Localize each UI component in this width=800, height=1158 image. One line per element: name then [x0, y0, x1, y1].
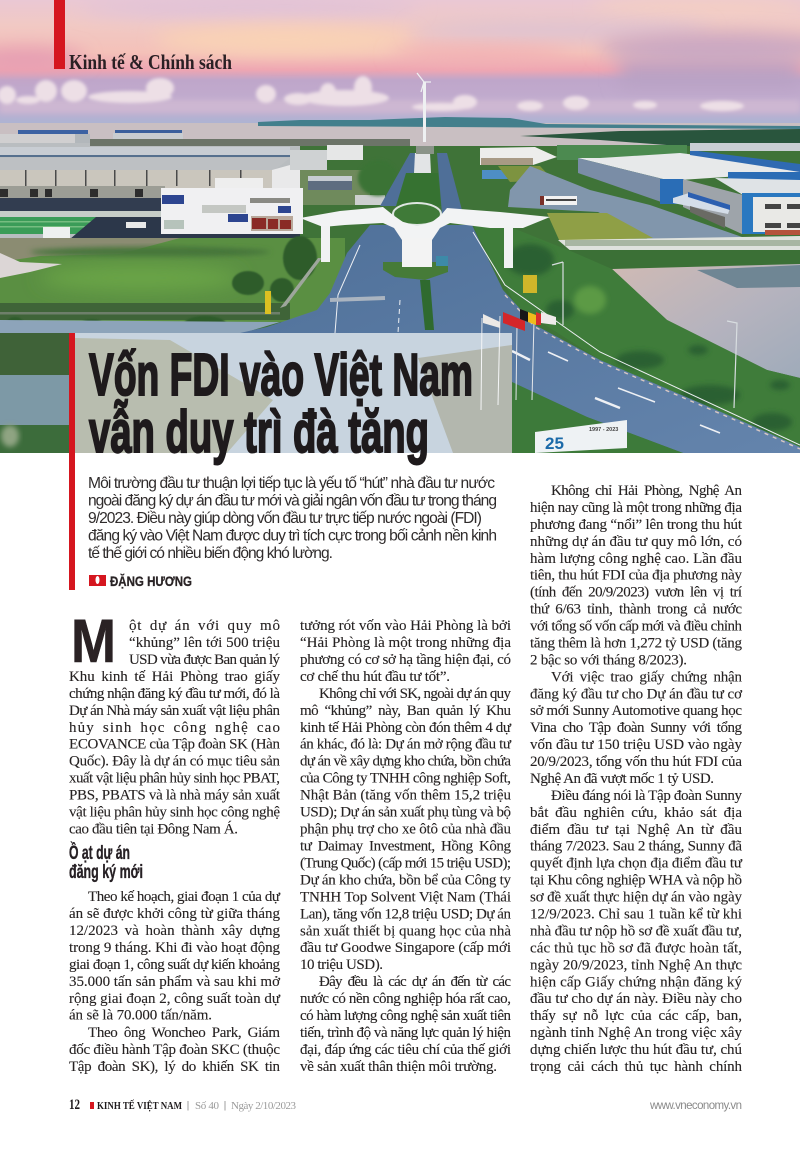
body column 1: án sẽ được khởi công từ giữa tháng — [69, 906, 280, 922]
title panel background — [75, 333, 512, 453]
body column 2: đại, đáp ứng các tiêu chí của thế giới — [300, 1042, 511, 1058]
body column 3: hiện nay cũng là một trong những địa — [530, 500, 742, 516]
body column 2: có hàm lượng công nghệ sản xuất tiên — [300, 1008, 512, 1024]
road seen through the title panel — [75, 333, 512, 453]
footer: KINH TẾ VIỆT NAM — [97, 1099, 182, 1112]
body column 2: kinh tế Hải Phòng còn đón thêm 4 dự — [300, 720, 512, 736]
sea — [0, 123, 800, 148]
body column 2: Nhật Bản (tăng vốn thêm 15,2 triệu — [300, 788, 512, 804]
body column 2: “Hải Phòng là một trong những địa — [300, 635, 511, 651]
body column 1: Dự án Nhà máy sản xuất vật liệu phân — [69, 703, 280, 719]
body column 2: phận phụ trợ cho xe ôtô của nhà đầu — [300, 822, 512, 838]
lawn — [547, 213, 653, 242]
lower left — [0, 333, 75, 453]
subheading — [69, 842, 143, 883]
footer: | — [224, 1100, 226, 1111]
byline: ĐẶNG HƯƠNG — [110, 574, 192, 589]
body column 3: vốn đầu tư 150 triệu USD vào ngày — [530, 737, 742, 753]
body column 3: trọng cải cách thủ tục hành chính — [530, 1059, 742, 1075]
body column 3: điểm đầu tư tại Nghệ An từ đầu — [530, 822, 742, 838]
street lamp — [552, 262, 737, 408]
footer: 12 — [69, 1097, 80, 1113]
body column 3: các thủ tục hồ sơ đã được hoàn tất, — [530, 940, 742, 956]
drop cap M: M — [71, 607, 116, 675]
body column 2: TNHH Top Solvent Việt Nam (Thái — [300, 889, 511, 905]
body column 3: sở mới Sunny Automotive quang học — [530, 703, 742, 719]
billboard: 1997 - 2023 — [589, 427, 618, 433]
body column 3: Với việc trao giấy chứng nhận — [551, 669, 742, 685]
warehouse roofs — [0, 147, 290, 157]
body column 3: tại Khu công nghiệp WHA và nộp hồ — [530, 873, 742, 889]
body column 3: 12/9/2023. Chỉ sau 1 tuần kể từ khi — [530, 906, 742, 922]
pond reflection — [697, 265, 800, 288]
body column 1: xuất vật liệu phân hủy sinh học PBAT, — [69, 771, 280, 787]
body column 2: sản xuất thiết bị quang học của nhà — [300, 923, 511, 939]
asphalt yard — [508, 166, 745, 240]
warehouse wall — [0, 165, 300, 198]
bottom vegetation — [512, 382, 683, 453]
green ground base — [250, 146, 800, 453]
body column 2: tưởng rót vốn vào Hải Phòng là bởi — [300, 618, 511, 634]
red accent bar on title and intro — [69, 333, 75, 590]
body column 3: quyết định lựa chọn địa điểm đầu tư — [530, 856, 743, 872]
main road — [240, 225, 800, 453]
gate — [300, 203, 550, 268]
body column 3: phương đang “nổi” lên trong thu hút — [530, 517, 743, 533]
trees near the field — [8, 236, 318, 322]
body column 3: 2 bậc so với tháng 8/2023). — [530, 652, 687, 668]
body column 3: thứ 6/63 tỉnh, thành trong cả nước — [530, 602, 742, 618]
billboard: 25 — [545, 434, 564, 453]
distant buildings — [0, 130, 410, 146]
road markings — [330, 232, 800, 449]
body column 2: Lan), tăng vốn 12,8 triệu USD; Dự án — [300, 906, 512, 922]
blue factory — [578, 143, 800, 235]
intro text: tế thế giới có nhiều biến động khó lường. — [88, 545, 333, 562]
parking — [0, 198, 300, 240]
body column 2: Không chỉ với SK, ngoài dự án quy — [319, 686, 512, 702]
body column 1 — [69, 618, 281, 1075]
red top bar — [54, 0, 65, 69]
body column 3: Vina cho Tập đoàn Sunny với tổng — [530, 720, 742, 736]
intro text: Môi trường đầu tư thuận lợi tiếp tục là yếu tố “hút” nhà đầu tư nước — [88, 475, 495, 492]
body column 2: mô “khủng” này, Ban quản lý Khu — [300, 703, 512, 719]
footer: | — [187, 1100, 189, 1111]
white building — [161, 178, 303, 234]
mangrove — [520, 129, 800, 146]
grey-green bank through the panel, right — [418, 345, 512, 453]
body column 3: ngày 20/9/2023, tỉnh Nghệ An thực — [530, 957, 742, 973]
body column 1: ECOVANCE của Tập đoàn SK (Hàn — [69, 737, 280, 753]
body column 1: 35.000 tấn sản phẩm và sau khi mở — [69, 974, 281, 990]
body column 3: dựng chiến lược thu hút đầu tư, chú — [530, 1042, 742, 1058]
pond — [612, 264, 800, 378]
vegetation texture — [506, 244, 792, 431]
footer — [69, 1097, 742, 1113]
body column 3: bắt đầu nghiên cứu, khảo sát địa — [530, 805, 742, 821]
body column 3: (tính đến 20/9/2023) vươn lên vị trí — [530, 585, 742, 601]
title: vẫn duy trì đà tăng — [89, 399, 429, 465]
body column 3: với tổng số vốn cấp mới và điều chỉnh — [530, 618, 742, 634]
title: Vốn FDI vào Việt Nam — [89, 342, 473, 408]
body column 2: của Công ty TNHH công nghiệp Soft, — [300, 771, 511, 787]
body column 1: Quốc). Đây là dự án có mục tiêu sản — [69, 754, 280, 770]
body column 2: về sản xuất thân thiện môi trường. — [300, 1059, 497, 1075]
body column 3: đăng ký đầu tư cho Dự án đầu tư cơ — [530, 686, 743, 702]
body column 1: Khu kinh tế Hải Phòng trao giấy — [69, 669, 280, 685]
body column 3: đầu tư cho dự án này. Điều này cho — [530, 991, 742, 1007]
upper road segments — [380, 146, 463, 214]
footer: Số 40 — [195, 1100, 220, 1112]
side road — [0, 320, 280, 334]
body column 3: thấy sự nỗ lực của các cấp, ban, — [530, 1008, 742, 1024]
body column 2: cơ chế thu hút đầu tư tốt”. — [300, 669, 450, 685]
body column 3: tiên, thu hút FDI của địa phương này — [530, 568, 742, 584]
body column 3: Không chỉ Hải Phòng, Nghệ An — [551, 483, 742, 499]
buildings behind the gate — [290, 145, 385, 205]
grey-green bank through the panel, left — [75, 338, 273, 453]
body column 1: Tập đoàn SK), lý do khiến SK tin — [69, 1059, 280, 1075]
body column 3: hàm lượng công nghệ cao. Lần đầu — [530, 551, 742, 567]
body column 1: giai đoạn 1, công suất dự kiến khoảng — [69, 957, 280, 973]
body column 2: (Trung Quốc) (cấp mới 15 triệu USD); — [300, 855, 511, 871]
body column 1: PBS, PBATS và là nhà máy sản xuất — [69, 788, 281, 804]
body column 3 — [530, 483, 743, 1075]
grass field — [0, 238, 345, 322]
intro text: ngoài đăng ký dự án đầu tư mới và giải ngân vốn đầu tư trong tháng — [88, 492, 497, 509]
body column 1: Theo kế hoạch, giai đoạn 1 của dự — [88, 889, 281, 905]
subheading: Ồ ạt dự án — [69, 842, 130, 864]
sky — [0, 0, 800, 125]
body column 3: nhà đầu tư nộp hồ sơ đề xuất đầu tư, — [530, 923, 742, 939]
body column 1: ột dự án với quy mô — [129, 618, 280, 634]
body column 3: tháng 7/2023. Sau 2 tháng, Sunny đã — [530, 839, 742, 855]
yellow signs — [265, 275, 537, 314]
intro text: đăng ký vào Việt Nam được duy trì tích cực trong bối cảnh nền kinh — [88, 528, 497, 545]
body column 2: 10 triệu USD). — [300, 957, 383, 973]
left ground base — [0, 143, 300, 240]
background photo: industrial park aerial view — [0, 0, 800, 453]
intro text: 9/2023. Điều này giúp dòng vốn đầu tư trực tiếp nước ngoài (FDI) — [88, 510, 482, 527]
footer: www.vneconomy.vn — [649, 1100, 742, 1112]
body column 2: dự án về xây dựng kho chứa, bồn chứa — [300, 754, 511, 770]
body column 2: án khác, đó là: Dự án mở rộng đầu tư — [300, 737, 512, 753]
section label: Kinh tế & Chính sách — [69, 50, 232, 74]
body column 1: “khủng” lên tới 500 triệu — [129, 635, 280, 651]
title — [89, 342, 473, 465]
island and horizon — [258, 117, 800, 129]
body column 1: trong 9 tháng. Khi đi vào hoạt động — [69, 940, 280, 956]
body column 3: ngành tỉnh Nghệ An trong việc xây — [530, 1025, 742, 1041]
walkway beside the road — [280, 258, 322, 308]
body column 3: Nghệ An đã vượt mốc 1 tỷ USD. — [530, 771, 714, 787]
body column 3: những dự án đầu tư quy mô lớn, có — [530, 534, 742, 550]
body column 2: nước có nền công nghiệp hóa rất cao, — [300, 991, 511, 1007]
flags — [481, 309, 556, 410]
body column 2: phương có cơ sở hạ tầng hiện đại, có — [300, 652, 511, 668]
fence strip — [558, 236, 800, 250]
body column 2: tư Daimay Investment, Hồng Kông — [300, 838, 512, 854]
body column 3: sơ đề xuất thực hiện dự án vào ngày — [530, 890, 742, 906]
body column 1: án sẽ là 70.000 tấn/năm. — [69, 1008, 212, 1024]
body column 1: cao đầu tiên tại Đông Nam Á. — [69, 820, 238, 838]
body column 1: USD vừa được Ban quản lý — [129, 652, 280, 668]
body column 1: 12/2023 và hoàn thành xây dựng — [69, 923, 280, 939]
clouds — [0, 76, 800, 113]
body column 2: Dự án kho chứa, bồn bể của Công ty — [300, 872, 512, 888]
body column 2 — [300, 618, 512, 1075]
intro text — [88, 475, 497, 562]
body column 3: tăng thêm là hơn 1,272 tỷ USD (tăng — [530, 636, 742, 652]
body column 2: tiến, trình độ và năng lực quản lý hiện — [300, 1025, 512, 1041]
roadside vegetation — [472, 222, 800, 448]
body column 1: rộng giai đoạn 2, công suất toàn dự — [69, 991, 281, 1007]
body column 2: USD); Dự án sản xuất phụ tùng và bộ — [300, 805, 511, 821]
body column 2: Đây đều là các dự án đến từ các — [319, 974, 511, 990]
body column 1: chứng nhận đăng ký đầu tư mới, đó là — [69, 686, 280, 702]
small far right building — [480, 145, 687, 182]
footer: Ngày 2/10/2023 — [231, 1100, 296, 1112]
body column 1: đốc điều hành Tập đoàn SKC (thuộc — [69, 1042, 280, 1058]
byline — [89, 574, 192, 589]
central green island — [383, 262, 448, 330]
body column 3: Điều đáng nói là Tập đoàn Sunny — [551, 788, 742, 804]
body column 2: đầu tư Goodwe Singapore (cấp mới — [300, 940, 511, 956]
body column 1: hủy sinh học công nghệ cao — [69, 720, 280, 736]
wind turbine — [417, 73, 431, 142]
body column 3: hiện cấp Giấy chứng nhận đăng ký — [530, 974, 742, 990]
body column 3: 20/9/2023, tổng vốn thu hút FDI của — [530, 754, 742, 770]
billboard — [535, 420, 627, 453]
right tree strip — [570, 250, 800, 252]
body column 1: Theo ông Woncheo Park, Giám — [88, 1025, 280, 1041]
subheading: đăng ký mới — [69, 862, 143, 883]
body column 1: vật liệu phân hủy sinh học công nghệ — [69, 805, 280, 821]
bus — [540, 196, 577, 205]
